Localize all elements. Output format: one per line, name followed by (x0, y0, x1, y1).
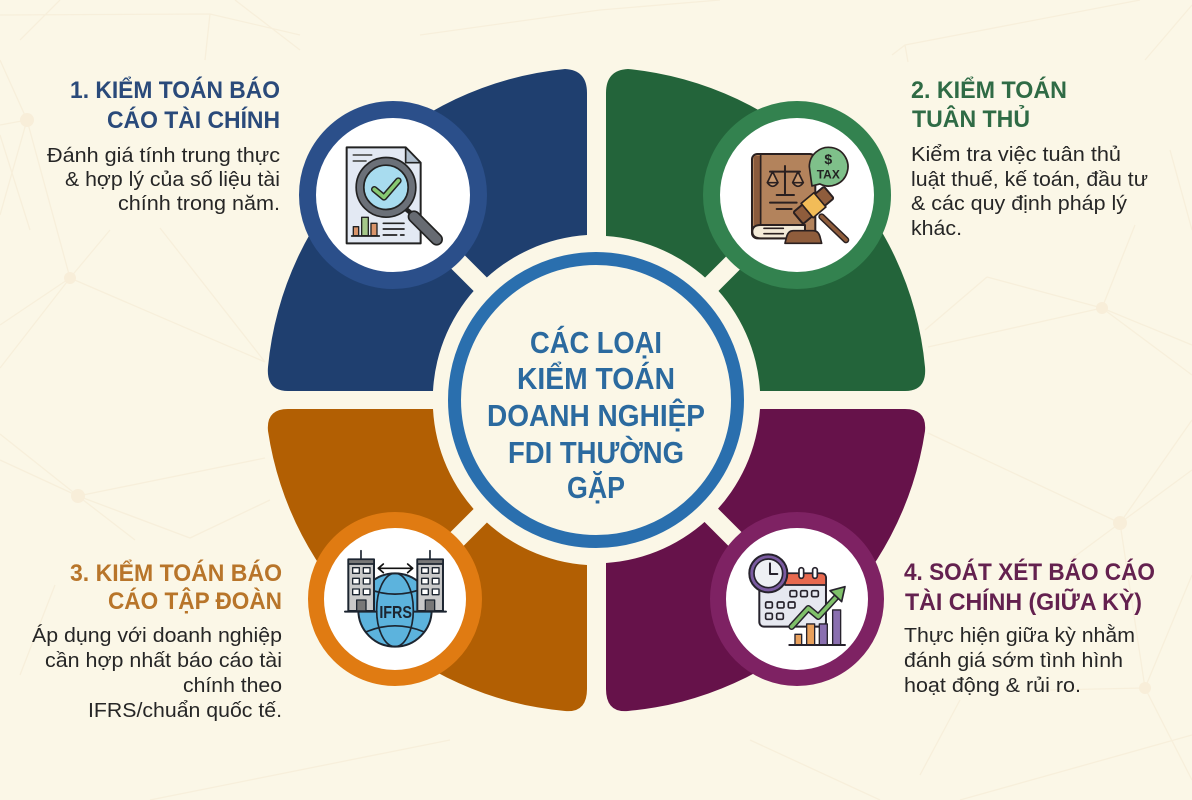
center hub: title circle (454, 258, 738, 542)
body 2: luật thuế, kế toán, đầu tư (911, 168, 1148, 191)
heading 1 (70, 76, 280, 134)
body 4: hoạt động & rủi ro. (904, 674, 1081, 697)
body 3: chính theo (183, 674, 282, 697)
icon: law book, gavel and tax bubble (752, 147, 848, 243)
body 1 (47, 144, 280, 215)
text block 3 (32, 559, 282, 722)
icon: law book, gavel and tax bubble: $ (824, 151, 832, 167)
heading 1: CÁO TÀI CHÍNH (107, 106, 280, 134)
heading 1: 1. KIỂM TOÁN BÁO (70, 76, 280, 104)
icon: law book, gavel and tax bubble: TAX (817, 168, 840, 182)
icon badge 4: mid-term review (718, 520, 876, 678)
text block 4 (904, 558, 1155, 697)
icon badge 2: law and tax (712, 110, 882, 280)
icon: two buildings and globe: IFRS (379, 602, 412, 622)
body 3: cần hợp nhất báo cáo tài (45, 649, 282, 672)
icon: two buildings and globe (345, 551, 446, 647)
body 2 (911, 143, 1148, 240)
title (487, 325, 705, 505)
icon badge 3: IFRS group (316, 520, 474, 678)
panel: quadrant 2 green (606, 69, 925, 391)
icon: report with magnifier (347, 147, 437, 243)
title: FDI THƯỜNG (508, 434, 684, 470)
body 3 (32, 624, 282, 722)
heading 2 (911, 76, 1067, 133)
heading 3: CÁO TẬP ĐOÀN (108, 587, 282, 615)
text block 1 (47, 76, 280, 215)
heading 4: 4. SOÁT XÉT BÁO CÁO (904, 558, 1155, 586)
title: KIỂM TOÁN (517, 361, 675, 396)
body 1: Đánh giá tính trung thực (47, 144, 280, 167)
connector gaps between hub and icons (440, 244, 752, 556)
body 3: Áp dụng với doanh nghiệp (32, 624, 282, 647)
heading 3: 3. KIỂM TOÁN BÁO (70, 559, 282, 587)
panel: quadrant 1 blue (268, 69, 587, 391)
title: DOANH NGHIỆP (487, 397, 705, 433)
panel: quadrant 4 purple (606, 409, 925, 711)
heading 2: 2. KIỂM TOÁN (911, 76, 1067, 104)
body 4 (904, 624, 1135, 697)
heading 2: TUÂN THỦ (912, 104, 1030, 133)
body 2: Kiểm tra việc tuân thủ (911, 143, 1121, 166)
heading 3 (70, 559, 282, 615)
body 2: khác. (911, 217, 962, 240)
icon: clock, calendar and growth chart (749, 554, 845, 645)
heading 4 (904, 558, 1155, 616)
icon badge 1: document audit (308, 110, 478, 280)
body 2: & các quy định pháp lý (911, 192, 1128, 215)
body 4: đánh giá sớm tình hình (904, 649, 1123, 672)
heading 4: TÀI CHÍNH (GIỮA KỲ) (905, 588, 1142, 616)
body 3: IFRS/chuẩn quốc tế. (88, 699, 282, 722)
body 4: Thực hiện giữa kỳ nhằm (904, 624, 1135, 647)
title: CÁC LOẠI (530, 325, 662, 360)
body 1: & hợp lý của số liệu tài (65, 168, 280, 191)
title: GẶP (567, 470, 625, 505)
panel: quadrant 3 orange (268, 409, 587, 711)
body 1: chính trong năm. (118, 192, 280, 215)
text block 2 (911, 76, 1148, 240)
